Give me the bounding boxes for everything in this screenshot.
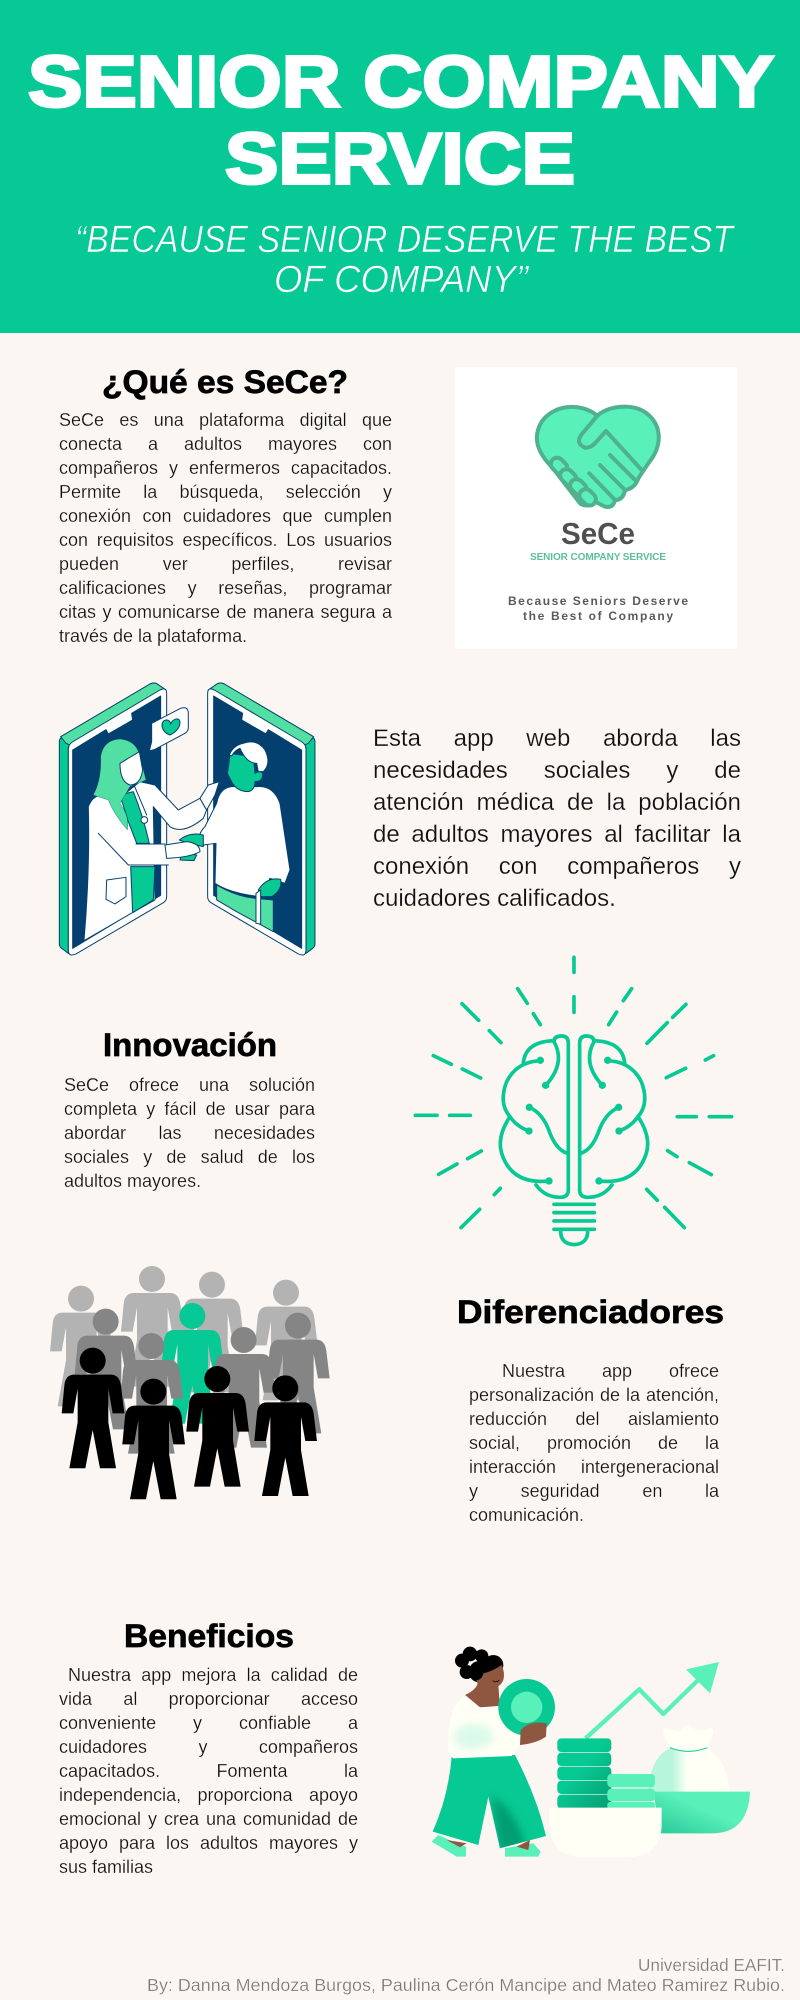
text block: benefits: independencia, proporciona apoyo — [59, 1785, 358, 1805]
logo subtitle: SENIOR COMPANY SERVICE — [530, 552, 666, 563]
text block: what is SeCe: compañeros y enfermeros capacitados. — [59, 458, 392, 478]
coin held — [498, 1679, 555, 1736]
text block: differentiators: interacción intergeneracional — [469, 1457, 719, 1477]
heading: Qué es SeCe: ¿Qué es SeCe? — [102, 364, 348, 400]
front bowl — [549, 1808, 662, 1857]
bulb base — [554, 1204, 594, 1245]
heading: Innovación: Innovación — [103, 1027, 277, 1063]
woman — [432, 1647, 555, 1857]
speech bubble with heart — [149, 708, 188, 751]
illustration: doctor and senior in phones — [59, 683, 315, 955]
text block: app purpose: conexión con compañeros y — [373, 853, 741, 880]
panel: SeCe logo card — [455, 367, 737, 649]
text block: what is SeCe: conexión con cuidadores que cumplen — [59, 506, 392, 526]
heading: Diferenciadores: Diferenciadores — [457, 1294, 724, 1330]
text block: differentiators: social, promoción de la — [469, 1433, 719, 1453]
title: SERVICE — [225, 120, 575, 200]
text block: differentiators — [469, 1361, 719, 1525]
logo tagline: Because Seniors Deserve — [508, 594, 688, 608]
illustration: woman with coins and growth arrow — [432, 1647, 750, 1857]
text block: what is SeCe: Permite la búsqueda, selección y — [59, 482, 392, 502]
logo name: SeCe — [561, 516, 635, 551]
header band — [0, 0, 800, 333]
text block: what is SeCe: través de la plataforma. — [59, 626, 247, 646]
subtitle tagline: OF COMPANY” — [274, 259, 530, 301]
text block: differentiators: comunicación. — [469, 1505, 584, 1525]
text block: what is SeCe: pueden ver perfiles, revisar — [59, 554, 392, 574]
light rays — [415, 957, 732, 1228]
text block: differentiators: reducción del aislamiento — [469, 1409, 719, 1429]
text block: innovation: completa y fácil de usar para — [64, 1099, 315, 1119]
text block: differentiators: Nuestra app ofrece — [502, 1361, 719, 1381]
back row grey people — [50, 1266, 318, 1406]
logo tagline: the Best of Company — [523, 609, 673, 623]
heading: Beneficios: Beneficios — [124, 1618, 294, 1654]
small coin stack — [607, 1774, 655, 1809]
doctor — [84, 739, 219, 941]
text block: what is SeCe: con requisitos específicos. Los usuarios — [59, 530, 392, 550]
logo tagline — [508, 594, 688, 623]
senior man — [200, 742, 290, 932]
text block: differentiators: y seguridad en la — [469, 1481, 719, 1501]
text block: innovation — [64, 1075, 315, 1191]
left phone — [59, 683, 167, 955]
brain left half — [500, 1036, 568, 1197]
middle row grey people — [75, 1309, 330, 1454]
text block: differentiators: personalización de la atención, — [469, 1385, 719, 1405]
handshake — [165, 834, 203, 861]
text block: what is SeCe — [59, 410, 392, 646]
text block: app purpose: de adultos mayores al facilitar la — [373, 821, 741, 848]
text block: innovation: sociales y de salud de los — [64, 1147, 315, 1167]
illustration: brain light bulb — [415, 957, 732, 1245]
title: SENIOR COMPANY — [28, 42, 774, 122]
highlighted green person — [161, 1303, 224, 1424]
text block: what is SeCe: conecta a adultos mayores con — [59, 434, 392, 454]
text block: innovation: abordar las necesidades — [64, 1123, 315, 1143]
text block: benefits: capacitados. Fomenta la — [59, 1761, 358, 1781]
text block: app purpose: Esta app web aborda las — [373, 725, 741, 752]
text block: what is SeCe: SeCe es una plataforma digital que — [59, 410, 392, 430]
text block: app purpose: atención médica de la población — [373, 789, 741, 816]
text block: benefits: apoyo para los adultos mayores y — [59, 1833, 358, 1853]
text block: innovation: adultos mayores. — [64, 1171, 201, 1191]
money sack — [648, 1725, 729, 1793]
title — [28, 42, 774, 200]
front row black people — [62, 1348, 317, 1499]
subtitle tagline: “BECAUSE SENIOR DESERVE THE BEST — [75, 219, 735, 261]
text block: app purpose: cuidadores calificados. — [373, 885, 616, 912]
growth arrow — [586, 1662, 719, 1738]
footer credits: By: Danna Mendoza Burgos, Paulina Cerón Mancipe and Mateo Ramirez Rubio. — [147, 1975, 785, 1995]
text block: benefits — [59, 1665, 358, 1877]
footer credits — [147, 1955, 785, 1995]
text block: what is SeCe: calificaciones y reseñas, programar — [59, 578, 392, 598]
brain right half — [580, 1036, 648, 1197]
right bowl — [653, 1792, 750, 1833]
text block: what is SeCe: citas y comunicarse de manera segura a — [59, 602, 392, 622]
subtitle tagline — [75, 219, 735, 301]
icon: handshake heart — [537, 407, 659, 508]
text block: app purpose — [373, 725, 741, 912]
coin stack — [557, 1738, 611, 1809]
text block: app purpose: necesidades sociales y de — [373, 757, 741, 784]
text block: benefits: cuidadores y compañeros — [59, 1737, 358, 1757]
text block: benefits: conveniente y confiable a — [59, 1713, 358, 1733]
text block: benefits: emocional y crea una comunidad de — [59, 1809, 358, 1829]
text block: benefits: vida al proporcionar acceso — [59, 1689, 358, 1709]
text block: benefits: sus familias — [59, 1857, 153, 1877]
footer credits: Universidad EAFIT. — [638, 1955, 785, 1975]
right phone — [208, 683, 315, 955]
text block: benefits: Nuestra app mejora la calidad de — [68, 1665, 358, 1685]
illustration: crowd of people — [50, 1266, 330, 1499]
text block: innovation: SeCe ofrece una solución — [64, 1075, 315, 1095]
